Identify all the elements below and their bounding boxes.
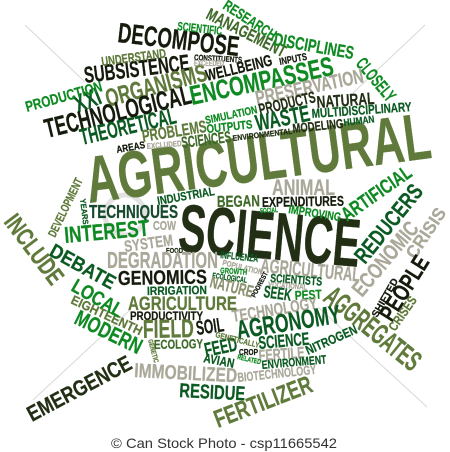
word: industrial: INDUSTRIAL [156,184,216,208]
word: seek: SEEK [262,282,293,305]
word: began: BEGAN [217,193,260,211]
word: genetic: GENETIC [146,339,159,364]
word: expenditures: EXPENDITURES [262,193,344,210]
word: subsistence: SUBSISTENCE [82,49,191,88]
word: social: SOCIAL [260,207,279,215]
word: modern: MODERN [71,305,146,359]
word: multidisciplinary: MULTIDISCIPLINARY [311,99,412,121]
word: management: MANAGEMENT [203,5,290,61]
word: soil: SOIL [195,314,225,340]
word: waste: WASTE [253,100,312,136]
word: field: FIELD [143,313,194,344]
word: disciplines: DISCIPLINES [272,29,356,63]
word: animal: ANIMAL [272,175,335,200]
word: ecological: ECOLOGICAL [212,271,248,285]
word: modeling: MODELING [292,116,344,136]
word: production: PRODUCTION [24,78,104,116]
word: natural: NATURAL [316,89,375,112]
word: artificial: ARTIFICIAL [337,162,416,226]
word: outputs: OUTPUTS [206,117,253,136]
word: simulation: SIMULATION [204,104,259,127]
word: nature: NATURE [208,272,255,302]
word: debate: DEBATE [46,240,119,294]
word: poorest: POOREST [251,270,270,299]
word: environmental: ENVIRONMENTAL [232,127,293,143]
word: organisms: ORGANISMS [102,59,210,113]
word: local: LOCAL [68,275,127,322]
word: irrigation: IRRIGATION [147,283,207,298]
word: agricultural small: AGRICULTURAL [260,255,361,287]
word: decompose: DECOMPOSE [116,17,241,62]
word: nitrogen: NITROGEN [303,322,359,358]
word: interest: INTEREST [63,215,150,248]
word: xxi: XXI [70,82,105,119]
word: reducers: REDUCERS [349,179,428,268]
word: genomics: GENOMICS [118,266,207,290]
word: cow: COW [153,218,177,233]
word: environment: ENVIRONMENT [261,352,328,372]
word: agriculture: AGRICULTURE [128,294,237,315]
word: feed: FEED [202,334,239,362]
word: excluded: EXCLUDED [146,139,182,151]
word: influenza: INFLUENZA [220,250,259,265]
word: areas: AREAS [116,140,146,156]
word: theoretical: THEORETICAL [77,102,179,150]
word: inputs: INPUTS [278,52,308,68]
word: science small: SCIENCE [258,329,310,353]
word: residue: RESIDUE [179,380,246,405]
word: understand: UNDERSTAND [100,46,167,69]
word: fertile: FERTILE [258,345,305,365]
word: avian: AVIAN [202,350,236,371]
word: include: INCLUDE [0,209,69,290]
word: closely: CLOSELY [352,54,400,106]
word: scientists: SCIENTISTS [270,271,323,289]
word: wellbeing: WELLBEING [204,52,274,85]
word: pest: PEST [294,287,322,303]
word: crises: CRISES [385,293,420,334]
word: biotechnology: BIOTECHNOLOGY [237,362,317,385]
word: scientific: SCIENTIFIC [177,19,223,38]
word: techniques: TECHNIQUES [89,202,178,222]
word: economic: ECONOMIC [347,216,424,301]
word: system: SYSTEM [123,232,174,256]
word: ecology: ECOLOGY [154,336,203,352]
word: products: PRODUCTS [257,89,318,119]
word: food: FOOD [166,248,183,255]
word: productivity: PRODUCTIVITY [130,309,203,323]
word: degradation: DEGRADATION [107,247,218,273]
word: growth: GROWTH [220,266,248,277]
word: vocational: VOCATIONAL [268,280,307,292]
word: development: DEVELOPMENT [45,175,86,239]
word: technology: TECHNOLOGY [231,294,319,326]
word: population: POPULATION [222,258,264,277]
word: technological: TECHNOLOGICAL [41,80,194,144]
word: preservation: PRESERVATION [253,66,366,110]
word: crop: CROP [239,348,259,357]
word: encompasses: ENCOMPASSES [187,51,336,111]
word: genetically: GENETICALLY [215,330,261,350]
word: people: PEOPLE [374,251,435,326]
word: years: YEARS [78,198,90,226]
word: fertilizer: FERTILIZER [210,371,316,434]
word: shifted: SHIFTED [370,277,401,320]
word: constituents: CONSTITUENTS [194,53,243,65]
word: eighteenth: EIGHTEENTH [69,292,145,338]
word: problems: PROBLEMS [141,117,208,146]
copyright line: © Can Stock Photo - csp11665542 [111,435,337,451]
word: related: RELATED [237,354,262,366]
watermark lines and logo [25,25,427,407]
word: sciences: SCIENCES [180,129,232,152]
word: immobilized: IMMOBILIZED [134,360,238,387]
word: agronomy: AGRONOMY [234,299,343,345]
word: emergence: EMERGENCE [23,350,136,426]
word: improving: IMPROVING [288,202,342,224]
word: human: HUMAN [343,114,375,129]
word: exceeded: EXCEEDED [194,59,224,68]
